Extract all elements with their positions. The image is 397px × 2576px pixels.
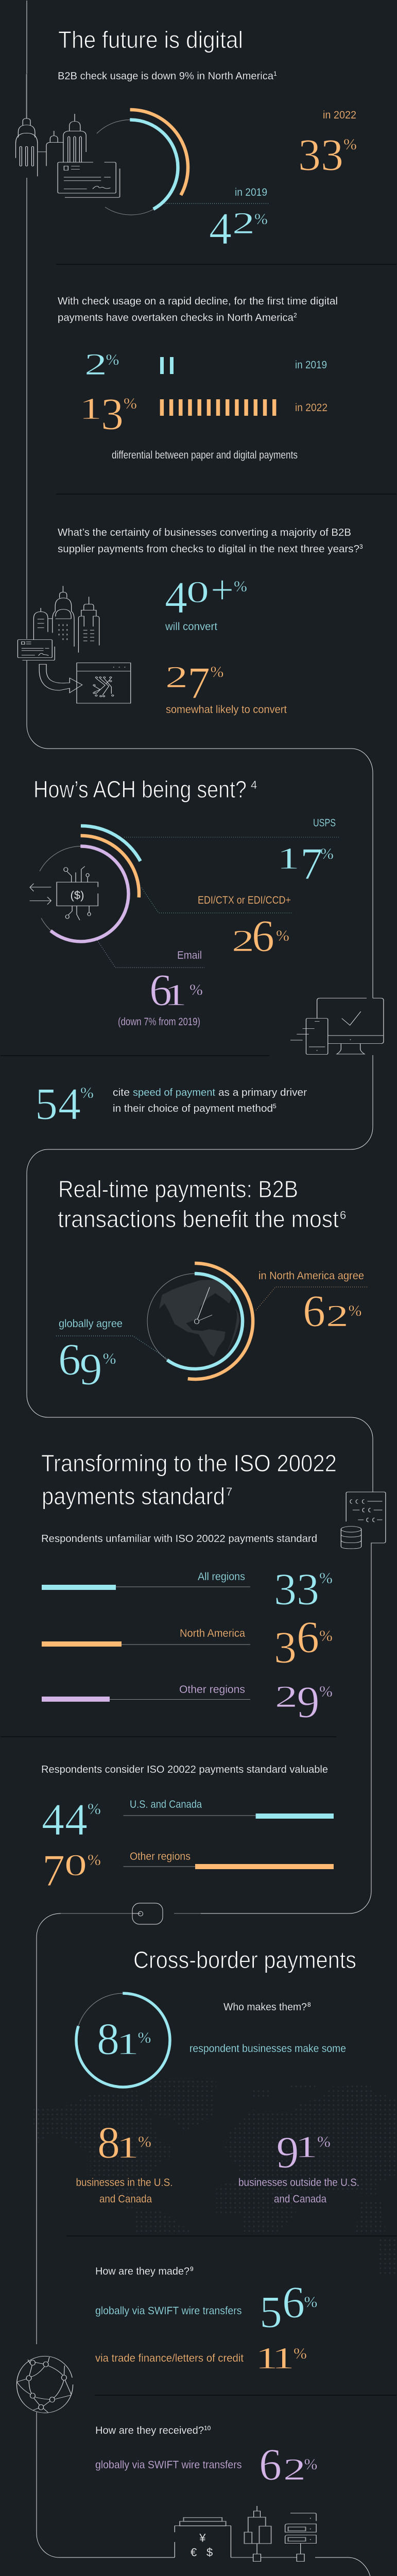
stat: 91% outside U.S. and Canada: 9 [276, 2128, 299, 2178]
stat: 91% outside U.S. and Canada: 1 [295, 2130, 318, 2164]
bar row: U.S. and Canada 44% [42, 1795, 334, 1845]
stat: 42% in 2019: 4 [209, 204, 232, 254]
stat: 56% SWIFT: % [304, 2293, 317, 2311]
stat: 69% globally agree: 6 [58, 1335, 81, 1385]
bar row: Other regions 29% [42, 1677, 333, 1727]
bar row: U.S. and Canada 44%: % [88, 1800, 101, 1818]
stat row: 2% in 2019: in 2019 [295, 359, 327, 371]
stat: EDI 26%: EDI/CTX or EDI/CCD+ [198, 894, 291, 906]
text: certainty question: What’s the certainty of businesses converting a majority of B2B [58, 527, 351, 538]
stat: 56% SWIFT [95, 2278, 317, 2337]
icon: skyline, check converting to digital [18, 586, 131, 703]
donut chart: check usage 2019 and 2022 [73, 110, 270, 225]
stat: 54% speed of payment: 4 [58, 1079, 81, 1129]
stat: 69% globally agree: globally agree [59, 1318, 123, 1330]
subheading: Who makes them: 8 [307, 2001, 311, 2008]
stat: 11% trade finance [95, 2342, 307, 2375]
stat: USPS 17% [277, 817, 336, 889]
heading: ISO 20022: 7 [226, 1485, 232, 1498]
stat: EDI 26% [198, 894, 291, 961]
world map dot background [33, 2080, 397, 2276]
stat row: 13% in 2022: 3 [101, 389, 124, 439]
stat: 91% outside U.S. and Canada: % [317, 2132, 331, 2150]
stat: USPS 17%: 7 [300, 839, 323, 889]
heading: How's ACH being sent: 4 [251, 778, 257, 791]
bar row: All regions 33% [42, 1565, 333, 1615]
bar row: All regions 33%: 3 [274, 1565, 297, 1615]
stat: 81% U.S. and Canada: businesses in the U.S. [76, 2177, 173, 2189]
text: certainty question [58, 527, 363, 555]
stat: 27% somewhat likely: 2 [165, 660, 188, 694]
bar row: All regions 33%: % [319, 1569, 333, 1587]
icon: bank, skyscraper and servers [175, 2506, 316, 2562]
icon: bank, skyscraper and servers: $ [206, 2546, 213, 2559]
stat: 33% in 2022: 3 [321, 130, 343, 180]
stat: 62% in North America agree: % [348, 1301, 361, 1319]
stat: 40+% will convert [165, 568, 247, 633]
bar row: Other regions 70%: 7 [42, 1846, 65, 1896]
stat row: 13% in 2022: % [124, 394, 137, 412]
bar row: North America 36%: 3 [274, 1623, 297, 1673]
heading: ISO 20022 [41, 1450, 337, 1510]
stat: Email 61%: 1 [164, 978, 187, 1012]
stat: Email 61% [118, 950, 203, 1028]
stat: USPS 17%: USPS [313, 817, 336, 829]
stat: 54% speed of payment [35, 1079, 307, 1129]
stat: Email 61%: % [189, 980, 203, 998]
caption: respondent businesses: respondent businesses make some [189, 2043, 346, 2055]
stat: 81% U.S. and Canada [76, 2118, 173, 2205]
heading: Real-time payments [58, 1176, 346, 1232]
stat: USPS 17%: 1 [277, 842, 300, 875]
stat: 40+% will convert: 4 [165, 573, 187, 623]
stat: 11% trade finance: 1 [255, 2342, 278, 2375]
stat: 54% speed of payment: cite [113, 1087, 130, 1098]
stat row: 13% in 2022: in 2022 [295, 402, 327, 414]
heading: Real-time payments: 6 [340, 1209, 346, 1222]
text: certainty question: supplier payments from checks to digital in the next three years? [58, 543, 359, 555]
stat: 91% outside U.S. and Canada: and Canada [274, 2193, 326, 2205]
icon: globe landmass and pin [159, 1279, 239, 1357]
donut chart: 81% make cross-border: % [138, 2028, 151, 2046]
stat: 27% somewhat likely [165, 658, 287, 716]
stat: 62% in North America agree [258, 1270, 364, 1336]
donut chart: 81% make cross-border: 1 [116, 2027, 139, 2061]
stat: 33% in 2022: in 2022 [323, 109, 356, 121]
subheading: How are they made: How are they made? [95, 2265, 189, 2277]
bar row: Other regions 70% [42, 1846, 334, 1896]
subheading: Who makes them: Who makes them? [223, 2001, 307, 2013]
stat: 62% SWIFT received [95, 2440, 317, 2490]
heading: Real-time payments: transactions benefit the most [58, 1206, 339, 1232]
heading: Cross-border payments: Cross-border payments [133, 1946, 356, 1973]
stat: 40+% will convert: 0 [186, 575, 209, 609]
stat: 54% speed of payment: in their choice of payment method [113, 1103, 273, 1114]
bar row: Other regions 70%: 0 [64, 1849, 87, 1882]
stat: 33% in 2022: 3 [298, 130, 321, 180]
stat: 40+% will convert: + [211, 568, 234, 613]
stat: 81% U.S. and Canada: 8 [97, 2118, 120, 2168]
bar row: Other regions 29%: % [319, 1682, 333, 1700]
stat: 54% speed of payment: as a primary driver [218, 1087, 307, 1098]
heading: ISO 20022: Transforming to the ISO 20022 [41, 1450, 337, 1477]
stat: 33% in 2022 [298, 109, 357, 180]
bar row: North America 36%: % [319, 1626, 333, 1645]
stat: 69% globally agree [58, 1318, 123, 1395]
stat row: 13% in 2022: 1 [79, 392, 102, 426]
subheading: How are they received: How are they received? [95, 2425, 204, 2436]
stat row: 2% in 2019 [84, 348, 327, 381]
icon: dollar chip with arrows [30, 867, 98, 920]
stat: 69% globally agree: % [103, 1349, 116, 1367]
stat: 11% trade finance: 1 [272, 2342, 295, 2375]
stat: 62% SWIFT received: % [304, 2455, 317, 2473]
stat: 54% speed of payment: speed of payment [133, 1087, 215, 1098]
stat: 11% trade finance: via trade finance/letters of credit [95, 2352, 244, 2364]
text: digital overtakes checks [58, 295, 338, 324]
stat: 56% SWIFT: globally via SWIFT wire transfers [95, 2305, 242, 2317]
caption: differential: differential between paper and digital payments [112, 449, 298, 461]
stat: 40+% will convert: will convert [165, 621, 217, 633]
stat: 42% in 2019: 2 [232, 207, 255, 240]
heading: ISO 20022: payments standard [42, 1483, 225, 1510]
stat: 11% trade finance: % [294, 2344, 307, 2362]
donut chart: 81% make cross-border: 8 [97, 2014, 119, 2064]
stat: 69% globally agree: 9 [79, 1345, 102, 1395]
bar row: U.S. and Canada 44%: U.S. and Canada [130, 1799, 202, 1810]
bar row: North America 36%: North America [180, 1628, 245, 1639]
subheading: How are they made: 9 [190, 2265, 194, 2273]
donut chart: ACH delivery methods [13, 826, 340, 968]
text: digital overtakes checks: payments have overtaken checks in North America [58, 312, 294, 324]
icon: bank, skyscraper and servers: ¥ [199, 2531, 206, 2544]
stat row: 13% in 2022 [79, 389, 327, 439]
stat: 56% SWIFT: 6 [282, 2278, 305, 2328]
stat: 40+% will convert: % [234, 577, 247, 595]
heading: Real-time payments: Real-time payments: B2B [58, 1176, 298, 1202]
stat: 42% in 2019 [209, 187, 268, 254]
stat: 56% SWIFT: 5 [260, 2287, 282, 2337]
bar row: U.S. and Canada 44%: 4 [42, 1795, 64, 1845]
icon: bank, skyscraper and servers: € [191, 2546, 197, 2559]
bar row: Other regions 29%: Other regions [179, 1684, 245, 1696]
icon: dollar chip with arrows: ($) [71, 889, 84, 902]
stat: 91% outside U.S. and Canada: businesses outside the U.S. [238, 2177, 359, 2189]
stat: 54% speed of payment: % [80, 1083, 94, 1101]
stat: 62% in North America agree: 6 [303, 1286, 325, 1336]
stat row: 2% in 2019: % [106, 350, 119, 368]
bar row: All regions 33%: All regions [198, 1571, 245, 1583]
stat: 54% speed of payment: 5 [35, 1079, 58, 1129]
stat: 27% somewhat likely: 7 [187, 658, 210, 708]
subheading: respondents consider valuable: Respondents consider ISO 20022 payments standard valuable [41, 1764, 328, 1775]
subheading: B2B check usage: 1 [273, 70, 277, 77]
stat: 54% speed of payment: 5 [273, 1103, 277, 1110]
stat: 91% outside U.S. and Canada [238, 2128, 359, 2205]
stat: 62% SWIFT received: globally via SWIFT wire transfers [95, 2459, 242, 2471]
bar row: North America 36% [42, 1613, 333, 1673]
bar row: North America 36%: 6 [297, 1613, 319, 1663]
stat: 81% U.S. and Canada: and Canada [99, 2193, 152, 2205]
donut chart: 81% make cross-border [76, 1993, 170, 2087]
stat: EDI 26%: 6 [252, 911, 274, 961]
heading: How's ACH being sent: How’s ACH being sent? [33, 776, 247, 803]
title: The future is digital: The future is digital [58, 26, 243, 53]
stat: Email 61%: 6 [149, 965, 172, 1015]
stat: 33% in 2022: % [343, 135, 357, 153]
stat: 42% in 2019: in 2019 [235, 187, 267, 198]
subheading: B2B check usage: B2B check usage is down 9% in North America [58, 70, 274, 82]
text: certainty question: 3 [359, 543, 363, 550]
text: digital overtakes checks: 2 [294, 312, 297, 319]
bar row: Other regions 70%: % [88, 1851, 101, 1869]
stat: 42% in 2019: % [254, 210, 268, 228]
subheading: How are they received: 10 [204, 2425, 211, 2432]
bar row: Other regions 29%: 9 [297, 1677, 319, 1727]
stat: 27% somewhat likely: % [210, 663, 223, 681]
stat: Email 61%: Email [177, 950, 202, 961]
icon: network globe [16, 2356, 73, 2413]
stat: USPS 17%: % [320, 844, 334, 862]
bar row: All regions 33%: 3 [297, 1565, 319, 1615]
stat: 62% in North America agree: 2 [326, 1299, 349, 1333]
icon: rounded connector node [132, 1903, 163, 1924]
stat: 81% U.S. and Canada: 1 [116, 2131, 139, 2164]
bar row: Other regions 70%: Other regions [130, 1851, 191, 1862]
stat row: 2% in 2019: 2 [84, 348, 107, 381]
icon: monitor and phone [290, 998, 384, 1055]
bar row: Other regions 29%: 2 [275, 1680, 298, 1714]
icon: document and database [341, 1492, 386, 1549]
stat: 62% SWIFT received: 2 [283, 2453, 306, 2486]
bar row: U.S. and Canada 44%: 4 [65, 1795, 88, 1845]
stat: Email 61%: (down 7% from 2019) [118, 1016, 200, 1028]
globe chart: real-time agreement [56, 1263, 367, 1379]
subheading: respondents unfamiliar: Respondents unfamiliar with ISO 20022 payments standard [41, 1533, 317, 1545]
stat: 27% somewhat likely: somewhat likely to convert [166, 704, 287, 716]
stat: 62% in North America agree: in North America agree [258, 1270, 364, 1282]
stat: 81% U.S. and Canada: % [138, 2132, 151, 2150]
icon: city skyline with check [15, 74, 120, 197]
stat: EDI 26%: % [276, 926, 289, 944]
stat: EDI 26%: 2 [232, 924, 254, 958]
text: digital overtakes checks: With check usage on a rapid decline, for the first time digital [58, 295, 338, 307]
stat: 62% SWIFT received: 6 [259, 2440, 282, 2490]
